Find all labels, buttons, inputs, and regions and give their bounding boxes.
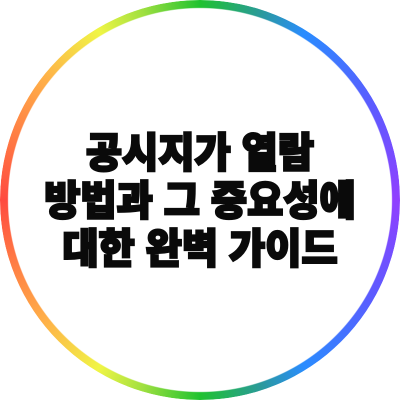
title: [44, 130, 356, 272]
title: 대한 완벽 가이드: [62, 226, 338, 272]
title: 공시지가 열람: [86, 130, 314, 176]
title: 방법과 그 중요성에: [44, 178, 356, 224]
